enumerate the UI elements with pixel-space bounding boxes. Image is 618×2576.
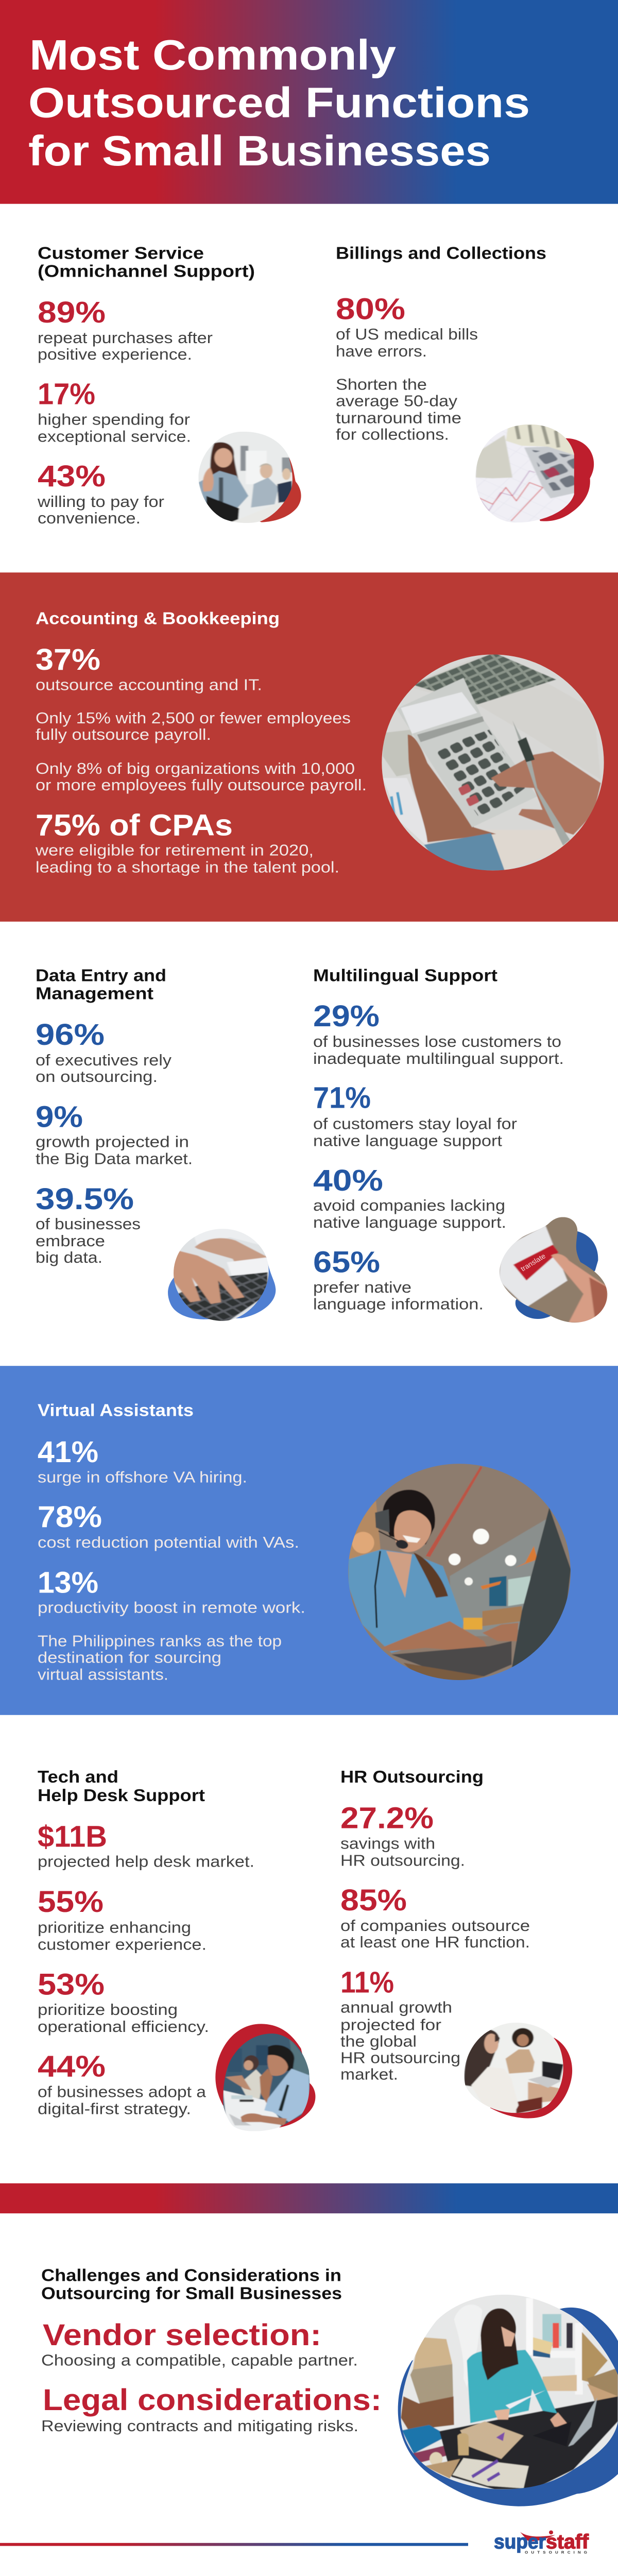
stat: 11% (340, 1965, 460, 2083)
stat: 9% (36, 1099, 193, 1167)
logo: superstaff outsourcing: staff (546, 2531, 589, 2553)
heading: data entry and management (36, 967, 166, 1003)
heading: challenges and considerations: Outsourcing for Small Businesses (41, 2284, 342, 2303)
stat: 53%: operational efficiency. (38, 2019, 209, 2036)
footer gradient line (0, 2543, 468, 2546)
stat: 41% (38, 1435, 247, 1486)
text block: turnaround time (336, 376, 461, 443)
stat: 17% (38, 377, 191, 445)
logo: superstaff outsourcing: super (494, 2531, 546, 2553)
stat: 89%: repeat purchases after (38, 329, 213, 347)
photo: hands using calculator (380, 651, 606, 873)
stat: 44% (38, 2049, 206, 2118)
stat: 29%: inadequate multilingual support. (313, 1050, 564, 1067)
stat: 43% (37, 459, 164, 527)
stat: $11B: $11B (38, 1819, 107, 1853)
heading: multilingual support: Multilingual Support (313, 967, 497, 985)
stat: 39.5%: 39.5% (36, 1182, 134, 1216)
panel: multilingual support (313, 967, 610, 1324)
title: for Small Businesses (28, 127, 491, 175)
stat: 37%: 37% (36, 642, 100, 676)
title (28, 31, 530, 175)
text block: payroll big organizations: Only 8% of big organizations with 10,000 (36, 760, 355, 777)
stat: 78%: 78% (38, 1500, 102, 1534)
stat: 65%: 65% (313, 1245, 380, 1279)
stat: 9%: growth projected in (36, 1133, 189, 1150)
stat: 85%: of companies outsource (340, 1917, 530, 1935)
logo: superstaff outsourcing: OUTSOURCING (525, 2550, 587, 2554)
photo: hands typing on keyboard (168, 1227, 276, 1323)
stat: 75% of CPAs: 75% of CPAs (36, 808, 233, 842)
text block: turnaround time: turnaround time (336, 410, 461, 427)
stat: 85%: 85% (340, 1883, 407, 1917)
text block: turnaround time: for collections. (336, 426, 449, 443)
stat: 44%: of businesses adopt a (38, 2083, 206, 2100)
stat: 27.2%: HR outsourcing. (340, 1852, 465, 1869)
stat: 40%: avoid companies lacking (313, 1197, 505, 1214)
stat: 9%: 9% (36, 1099, 83, 1133)
heading: hr outsourcing: HR Outsourcing (340, 1768, 484, 1787)
stat: 41%: surge in offshore VA hiring. (38, 1469, 247, 1486)
stat: 75% of CPAs: were eligible for retirement in 2020, (35, 842, 314, 859)
heading: tech and help desk support (38, 1768, 205, 1805)
stat: 40%: native language support. (313, 1214, 506, 1231)
photo: cash, calculator and chart (472, 422, 594, 526)
photo: two colleagues meeting (459, 2021, 572, 2119)
stat: 55%: prioritize enhancing (38, 1919, 191, 1937)
heading: customer service: (Omnichannel Support) (38, 262, 255, 281)
stat: 11%: market. (340, 2066, 398, 2083)
stat: 11%: the global (340, 2033, 417, 2050)
stat: 65%: prefer native (313, 1279, 411, 1296)
item: legal considerations: Reviewing contracts and mitigating risks. (41, 2417, 358, 2435)
text block: payroll big organizations: or more employees fully outsource payroll. (36, 777, 367, 794)
heading: billings and collections: Billings and Collections (336, 244, 546, 263)
stat: 39.5%: embrace (36, 1232, 105, 1250)
stat: 17%: 17% (38, 377, 95, 411)
stat: $11B (38, 1819, 254, 1870)
stat: 65% (313, 1245, 484, 1313)
stat: 80%: have errors. (336, 343, 427, 360)
text block: payroll small firms (36, 709, 351, 743)
stat: 40% (313, 1163, 506, 1231)
header banner (0, 0, 618, 204)
stat: 55%: 55% (38, 1885, 104, 1919)
item: vendor selection: Choosing a compatible, capable partner. (41, 2352, 358, 2369)
heading: data entry and management: Data Entry and (36, 967, 166, 985)
stat: 80%: of US medical bills (336, 326, 478, 343)
panel: virtual assistants (0, 1366, 618, 1715)
stat: $11B: projected help desk market. (38, 1853, 254, 1870)
panel: tech and help desk support (38, 1768, 315, 2134)
stat: 27.2% (340, 1801, 465, 1869)
stat: 75% of CPAs: leading to a shortage in the talent pool. (36, 859, 339, 876)
stat: 43%: willing to pay for (37, 493, 164, 511)
stat: 55% (38, 1885, 207, 1954)
panel: customer service (37, 244, 301, 528)
stat: 89% (38, 295, 213, 363)
heading: virtual assistants: Virtual Assistants (38, 1401, 194, 1420)
text block: turnaround time: average 50-day (336, 393, 458, 410)
photo: finger pressing translate key (493, 1215, 610, 1324)
stat: 71%: 71% (313, 1080, 371, 1114)
stat: 39.5%: of businesses (36, 1215, 141, 1233)
stat: 89%: positive experience. (38, 346, 192, 363)
item: legal considerations (41, 2383, 382, 2435)
panel: billings and collections (336, 244, 594, 526)
logo swoosh (520, 2532, 555, 2541)
stat: 44%: 44% (38, 2049, 106, 2083)
stat: 71% (313, 1080, 517, 1149)
stat: 85% (340, 1883, 530, 1951)
item: vendor selection (41, 2318, 358, 2369)
heading: challenges and considerations (41, 2266, 342, 2303)
stat: 29%: of businesses lose customers to (313, 1033, 561, 1050)
stat: 11%: annual growth (340, 1999, 452, 2016)
stat: 80%: 80% (336, 292, 405, 326)
panel: challenges and considerations (41, 2266, 618, 2506)
heading: challenges and considerations: Challenges and Considerations in (41, 2266, 341, 2285)
stat: 11%: 11% (340, 1965, 394, 1999)
stat: 75% of CPAs (35, 808, 339, 876)
stat: 29% (313, 999, 564, 1067)
stat: 71%: native language support (313, 1132, 503, 1149)
heading: data entry and management: Management (36, 985, 153, 1003)
stat: 53%: 53% (38, 1967, 105, 2001)
stat: 71%: of customers stay loyal for (313, 1115, 517, 1132)
heading: customer service (38, 244, 255, 281)
stat: 17%: exceptional service. (38, 428, 191, 445)
stat: 27.2%: savings with (340, 1835, 435, 1852)
stat: 9%: the Big Data market. (36, 1150, 193, 1167)
stat: 85%: at least one HR function. (340, 1934, 530, 1951)
stat: 11%: HR outsourcing (340, 2049, 460, 2066)
stat: 89%: 89% (38, 295, 106, 329)
panel: data entry and management (36, 967, 276, 1323)
stat: 96%: of executives rely (36, 1052, 172, 1069)
text block: philippines (38, 1633, 282, 1684)
text block: turnaround time: Shorten the (336, 376, 427, 393)
gradient divider bar (0, 2183, 618, 2213)
text block: philippines: virtual assistants. (38, 1666, 168, 1684)
stat: 78% (38, 1500, 299, 1551)
stat: 53% (38, 1967, 209, 2036)
photo: virtual assistant with headset (347, 1463, 573, 1683)
text block: payroll small firms: fully outsource payroll. (36, 726, 211, 743)
stat: 53%: prioritize boosting (38, 2002, 178, 2019)
panel: accounting and bookkeeping (0, 572, 618, 922)
title: Outsourced Functions (28, 79, 530, 126)
stat: 13%: productivity boost in remote work. (38, 1599, 305, 1616)
logo: superstaff outsourcing (494, 2531, 589, 2554)
stat: 13%: 13% (38, 1565, 98, 1599)
stat: 55%: customer experience. (38, 1936, 207, 1954)
stat: 27.2%: 27.2% (340, 1801, 434, 1835)
stat: 43%: 43% (38, 459, 106, 493)
title: Most Commonly (29, 31, 396, 79)
photo: help desk agent (215, 2024, 315, 2134)
stat: 78%: cost reduction potential with VAs. (38, 1534, 299, 1551)
text block: philippines: The Philippines ranks as the top (38, 1633, 282, 1650)
key label: translate: translate (519, 1252, 547, 1273)
stat: 11%: projected for (340, 2016, 441, 2033)
heading: tech and help desk support: Help Desk Support (38, 1786, 205, 1805)
heading: accounting and bookkeeping: Accounting & Bookkeeping (36, 609, 280, 628)
stat: 40%: 40% (313, 1163, 383, 1197)
stat: 39.5% (36, 1182, 141, 1266)
stat: 43%: convenience. (38, 510, 141, 527)
heading: tech and help desk support: Tech and (38, 1768, 118, 1787)
stat: 39.5%: big data. (36, 1249, 102, 1266)
text block: philippines: destination for sourcing (38, 1649, 221, 1667)
photo: call center agents giving thumbs up (199, 432, 301, 523)
stat: 17%: higher spending for (38, 411, 190, 428)
stat: 37% (36, 642, 262, 694)
stat: 65%: language information. (313, 1296, 484, 1313)
item: legal considerations: Legal considerations: (43, 2383, 382, 2417)
stat: 80% (336, 292, 478, 360)
stat: 44%: digital-first strategy. (38, 2100, 191, 2118)
photo: small business owner packing orders (398, 2293, 618, 2506)
panel: hr outsourcing (340, 1768, 572, 2119)
stat: 41%: 41% (38, 1435, 98, 1469)
stat: 96%: on outsourcing. (36, 1068, 158, 1086)
stat: 29%: 29% (313, 999, 380, 1033)
stat: 37%: outsource accounting and IT. (36, 676, 262, 694)
stat: 13% (38, 1565, 305, 1616)
text block: payroll small firms: Only 15% with 2,500 or fewer employees (36, 709, 351, 727)
stat: 96%: 96% (36, 1018, 105, 1052)
item: vendor selection: Vendor selection: (43, 2318, 321, 2352)
stat: 96% (36, 1018, 172, 1086)
text block: payroll big organizations (36, 760, 367, 794)
heading: customer service: Customer Service (38, 244, 204, 263)
